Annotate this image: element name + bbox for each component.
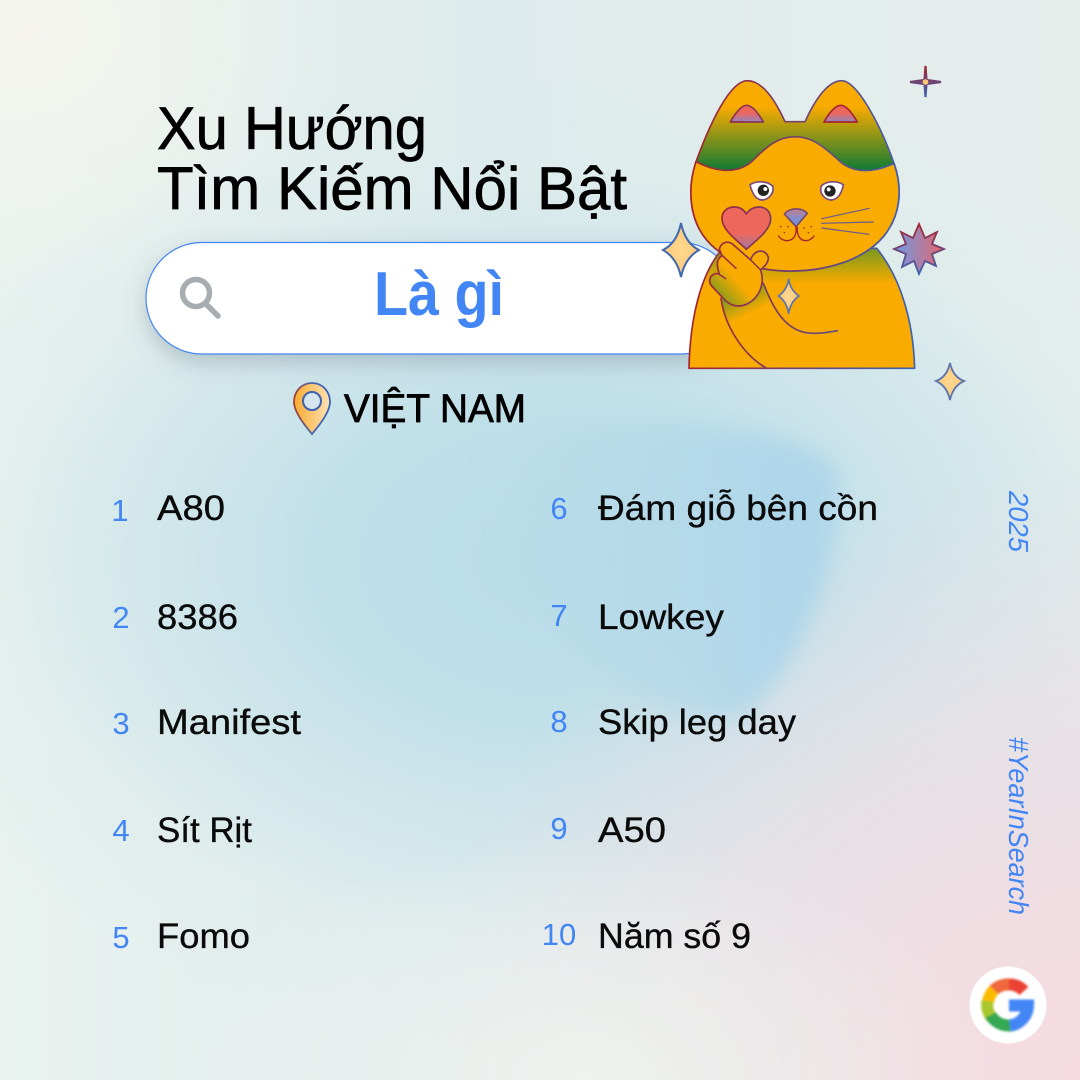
ranking list left column: 2 — [112, 600, 130, 635]
ranking list right column: 10 — [542, 917, 576, 952]
title: Tìm Kiếm Nổi Bật — [157, 155, 627, 222]
ranking list right column: 8 — [550, 704, 568, 739]
ranking list left column: 8386 — [157, 598, 238, 637]
ranking list left column — [111, 489, 301, 956]
cat body — [689, 248, 915, 368]
cat ears — [730, 105, 857, 122]
star: purple burst — [894, 224, 944, 274]
cat whiskers left — [719, 208, 730, 234]
year label: 2025 — [1003, 490, 1034, 552]
location: Việt Nam — [294, 383, 526, 434]
ranking list right column: 7 — [550, 598, 568, 633]
ranking list left column: 1 — [111, 493, 129, 528]
ranking list left column: Fomo — [157, 917, 250, 956]
ranking list left column: Manifest — [157, 703, 301, 742]
illustration: cat — [689, 81, 915, 368]
heart — [722, 207, 771, 249]
ranking list left column: 5 — [112, 920, 130, 955]
cat arm shading — [721, 283, 787, 340]
icon: map pin — [294, 383, 330, 434]
ranking list right column: Lowkey — [598, 598, 725, 637]
search bar — [146, 242, 736, 354]
hashtag: #YearInSearch — [1003, 737, 1034, 915]
title: Xu Hướng — [157, 95, 427, 162]
ranking list right column: 9 — [550, 811, 568, 846]
cat hand — [710, 242, 768, 306]
ranking list left column: 3 — [112, 706, 130, 741]
cat nose and mouth — [779, 209, 814, 241]
Google logo — [970, 966, 1046, 1044]
background blue shape — [480, 423, 838, 718]
sparkle: top right — [910, 66, 941, 97]
ranking list left column: 4 — [112, 813, 130, 848]
sparkle: lower right — [936, 363, 964, 400]
ranking list right column: Skip leg day — [598, 703, 797, 742]
ranking list right column — [542, 489, 878, 956]
icon: Google G — [987, 984, 1028, 1026]
cat arm lines — [721, 283, 837, 368]
cat head — [691, 81, 899, 271]
cat face — [691, 137, 899, 271]
title — [157, 95, 627, 222]
ranking list right column: Đám giỗ bên cồn — [598, 489, 878, 528]
ranking list left column: A80 — [157, 489, 225, 528]
search term: Là gì — [374, 260, 504, 329]
ranking list left column: Sít Rịt — [157, 811, 252, 850]
ranking list right column: 6 — [550, 491, 568, 526]
sparkle: on search bar — [663, 223, 699, 277]
sparkle: on chest — [778, 279, 799, 313]
cat eyes — [750, 182, 843, 200]
ranking list right column: A50 — [598, 811, 666, 850]
icon: magnifying glass — [182, 280, 218, 316]
location label: VIỆT NAM — [344, 386, 526, 431]
cat whiskers — [822, 208, 873, 234]
ranking list right column: Năm số 9 — [598, 917, 751, 956]
